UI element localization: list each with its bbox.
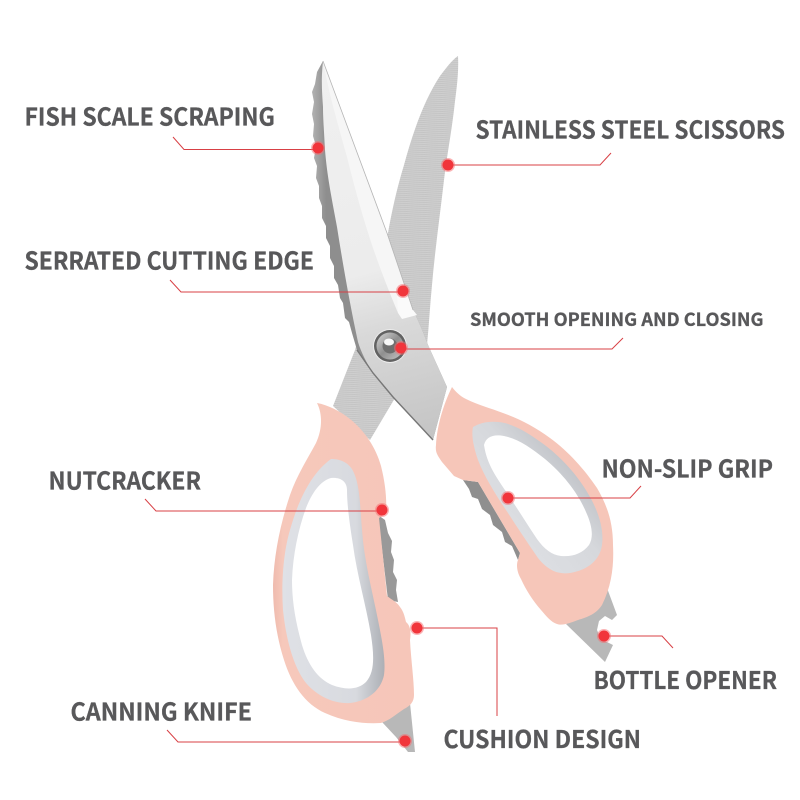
label: bottle opener: BOTTLE OPENER: [594, 661, 777, 696]
label: canning knife: [70, 692, 412, 748]
label: non-slip grip: NON-SLIP GRIP: [602, 450, 773, 484]
label: serrated cutting edge: SERRATED CUTTING EDGE: [24, 242, 314, 276]
label: non-slip grip: [501, 450, 773, 505]
serrated tang right handle: [463, 480, 520, 560]
canning knife tip: [382, 703, 415, 752]
serrated tang left handle: [378, 515, 398, 602]
pivot rivet: [373, 329, 407, 363]
label: stainless steel scissors: STAINLESS STEEL SCISSORS: [476, 110, 785, 146]
label: nutcracker: [48, 462, 389, 517]
bottle opener tip: [566, 588, 617, 662]
label: canning knife: CANNING KNIFE: [70, 692, 252, 728]
label: smooth opening and closing: SMOOTH OPENING AND CLOSING: [470, 306, 764, 332]
right handle: [436, 387, 613, 625]
rear blade: [333, 56, 458, 440]
label: serrated cutting edge: [24, 242, 410, 298]
label: cushion design: [410, 621, 641, 755]
label: nutcracker: NUTCRACKER: [48, 462, 201, 496]
front blade with serrated spine: [312, 61, 447, 440]
scissors illustration: [273, 56, 617, 752]
label: smooth opening and closing: [394, 306, 764, 355]
label: fish scale scraping: FISH SCALE SCRAPING: [24, 98, 275, 132]
label: fish scale scraping: [24, 98, 325, 155]
label: bottle opener: [594, 629, 777, 696]
label: cushion design: CUSHION DESIGN: [444, 720, 641, 755]
label: stainless steel scissors: [441, 110, 785, 172]
left handle: [273, 403, 414, 723]
